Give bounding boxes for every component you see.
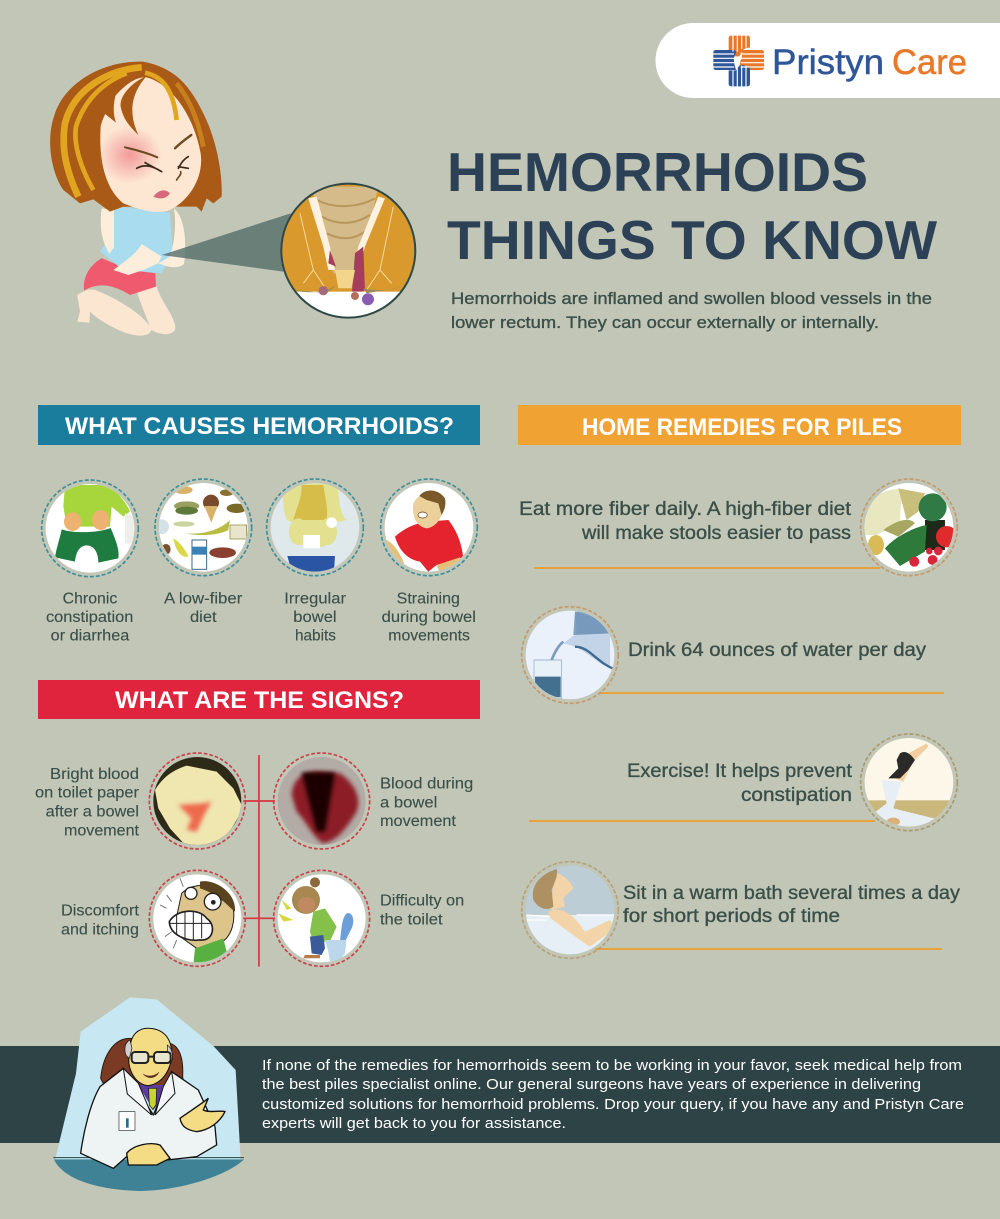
connector lines xyxy=(243,755,275,967)
logo wordmark xyxy=(772,43,967,82)
heading: what are the signs xyxy=(38,680,480,719)
sign labels left: after a bowel xyxy=(46,803,139,820)
remedy: warm bath xyxy=(522,862,961,958)
hands xyxy=(127,1098,225,1165)
icon: water glass xyxy=(522,607,618,703)
footer text xyxy=(262,1058,964,1132)
girl legs xyxy=(77,285,175,336)
heading: what causes xyxy=(38,405,480,445)
intro text: Hemorrhoids are inflamed and swollen blood vessels in the xyxy=(451,289,932,308)
mouth xyxy=(143,1072,159,1078)
blue backdrop xyxy=(55,997,241,1160)
sign labels right: a bowel xyxy=(380,794,437,811)
icon: low-fiber diet foods xyxy=(154,479,252,576)
intro text: lower rectum. They can occur externally or internally. xyxy=(451,313,879,332)
glasses xyxy=(132,1052,171,1063)
icon: chronic constipation xyxy=(42,480,138,577)
icon: blood on toilet paper xyxy=(149,753,245,849)
icon: irregular bowel habits xyxy=(267,479,363,576)
desk xyxy=(54,1159,244,1191)
remedy: exercise xyxy=(529,734,957,831)
sign labels left: on toilet paper xyxy=(35,785,139,802)
icon: vegetables xyxy=(861,479,957,576)
remedy text: Drink 64 ounces of water per day xyxy=(628,640,927,661)
top xyxy=(100,206,173,273)
cause labels: A low-fiber xyxy=(164,590,242,607)
remedy text: Eat more fiber daily. A high-fiber diet xyxy=(519,499,852,520)
remedy text: for short periods of time xyxy=(623,906,840,927)
footer band xyxy=(0,1046,1000,1143)
icon: yoga xyxy=(861,734,957,831)
heading: what causes: WHAT CAUSES HEMORRHOIDS? xyxy=(65,413,454,440)
magnified anatomy xyxy=(280,183,417,322)
remedy line xyxy=(534,567,880,569)
hair highlights xyxy=(64,67,203,197)
cause labels: or diarrhea xyxy=(51,627,130,644)
cause labels xyxy=(46,590,476,644)
panel: signs xyxy=(35,753,473,967)
remedy text: Sit in a warm bath several times a day xyxy=(623,883,961,904)
lapels xyxy=(123,1068,175,1115)
remedy: fiber xyxy=(519,479,957,576)
cheek flush xyxy=(98,127,162,183)
cause labels: during bowel xyxy=(382,609,476,626)
heading: home remedies xyxy=(518,405,961,445)
intro text xyxy=(451,289,932,332)
cause labels: Irregular xyxy=(284,590,346,607)
title: THINGS TO KNOW xyxy=(447,209,937,271)
illustration: girl in pain with magnified view xyxy=(50,62,417,336)
remedy line xyxy=(600,692,944,694)
remedy text: will make stools easier to pass xyxy=(581,523,851,544)
logo wordmark: Care xyxy=(892,43,967,82)
cause labels: bowel xyxy=(293,609,337,626)
heading: what are the signs: WHAT ARE THE SIGNS? xyxy=(115,687,404,714)
cone xyxy=(162,213,291,272)
icon: woman in bath xyxy=(522,862,618,958)
illustration: doctor at desk xyxy=(53,997,244,1191)
cause labels: habits xyxy=(295,627,336,644)
sign labels left: and itching xyxy=(61,921,139,938)
remedy text xyxy=(627,761,853,806)
remedy text xyxy=(623,883,961,927)
cause labels: movements xyxy=(388,627,470,644)
shorts xyxy=(84,258,156,295)
cause labels: Straining xyxy=(397,590,460,607)
footer text: experts will get back to you for assistance. xyxy=(262,1116,566,1132)
remedy line xyxy=(529,820,875,822)
icon: straining man xyxy=(381,479,477,576)
cause labels: constipation xyxy=(46,609,133,626)
sign labels right xyxy=(380,776,473,928)
remedy text: constipation xyxy=(741,785,852,806)
footer text: customized solutions for hemorrhoid problems. Drop your query, if you have any and Pristyn Care xyxy=(262,1097,964,1113)
title: HEMORRHOIDS xyxy=(447,141,868,203)
icon: discomfort and itching xyxy=(149,870,245,966)
shirt and tie xyxy=(138,1085,172,1110)
coat xyxy=(81,1068,217,1168)
icon: difficulty on the toilet xyxy=(274,870,370,966)
remedy: water xyxy=(522,607,944,703)
chair xyxy=(101,1038,193,1157)
badge xyxy=(119,1112,135,1130)
sign labels right: the toilet xyxy=(380,911,443,928)
panel: causes xyxy=(42,479,477,644)
remedy line xyxy=(595,948,942,950)
logo: Pristyn Care xyxy=(656,23,1000,98)
sign labels right: movement xyxy=(380,813,457,830)
sign labels right: Blood during xyxy=(380,776,473,793)
sign labels left: Bright blood xyxy=(50,766,139,783)
logo wordmark: Pristyn xyxy=(772,43,884,82)
arms xyxy=(101,208,185,275)
bangs xyxy=(103,76,147,135)
icon: logo cross xyxy=(713,35,765,87)
footer text: If none of the remedies for hemorrhoids seem to be working in your favor, seek medical help from xyxy=(262,1058,962,1074)
head xyxy=(129,1028,172,1086)
sign labels left: movement xyxy=(64,823,140,840)
hair back xyxy=(50,62,222,212)
title xyxy=(447,141,937,271)
sign labels left xyxy=(35,766,140,938)
remedy text xyxy=(519,499,852,544)
sign labels right: Difficulty on xyxy=(380,893,464,910)
footer text: the best piles specialist online. Our general surgeons have years of experience in delivering xyxy=(262,1077,921,1093)
face xyxy=(100,77,201,212)
cause labels: diet xyxy=(190,609,217,626)
facial features xyxy=(125,135,191,180)
sign labels left: Discomfort xyxy=(61,903,140,920)
remedy text: Exercise! It helps prevent xyxy=(627,761,853,782)
icon: blood in bowl xyxy=(274,753,370,849)
cause labels: Chronic xyxy=(63,590,118,607)
heading: home remedies: HOME REMEDIES FOR PILES xyxy=(582,414,902,441)
